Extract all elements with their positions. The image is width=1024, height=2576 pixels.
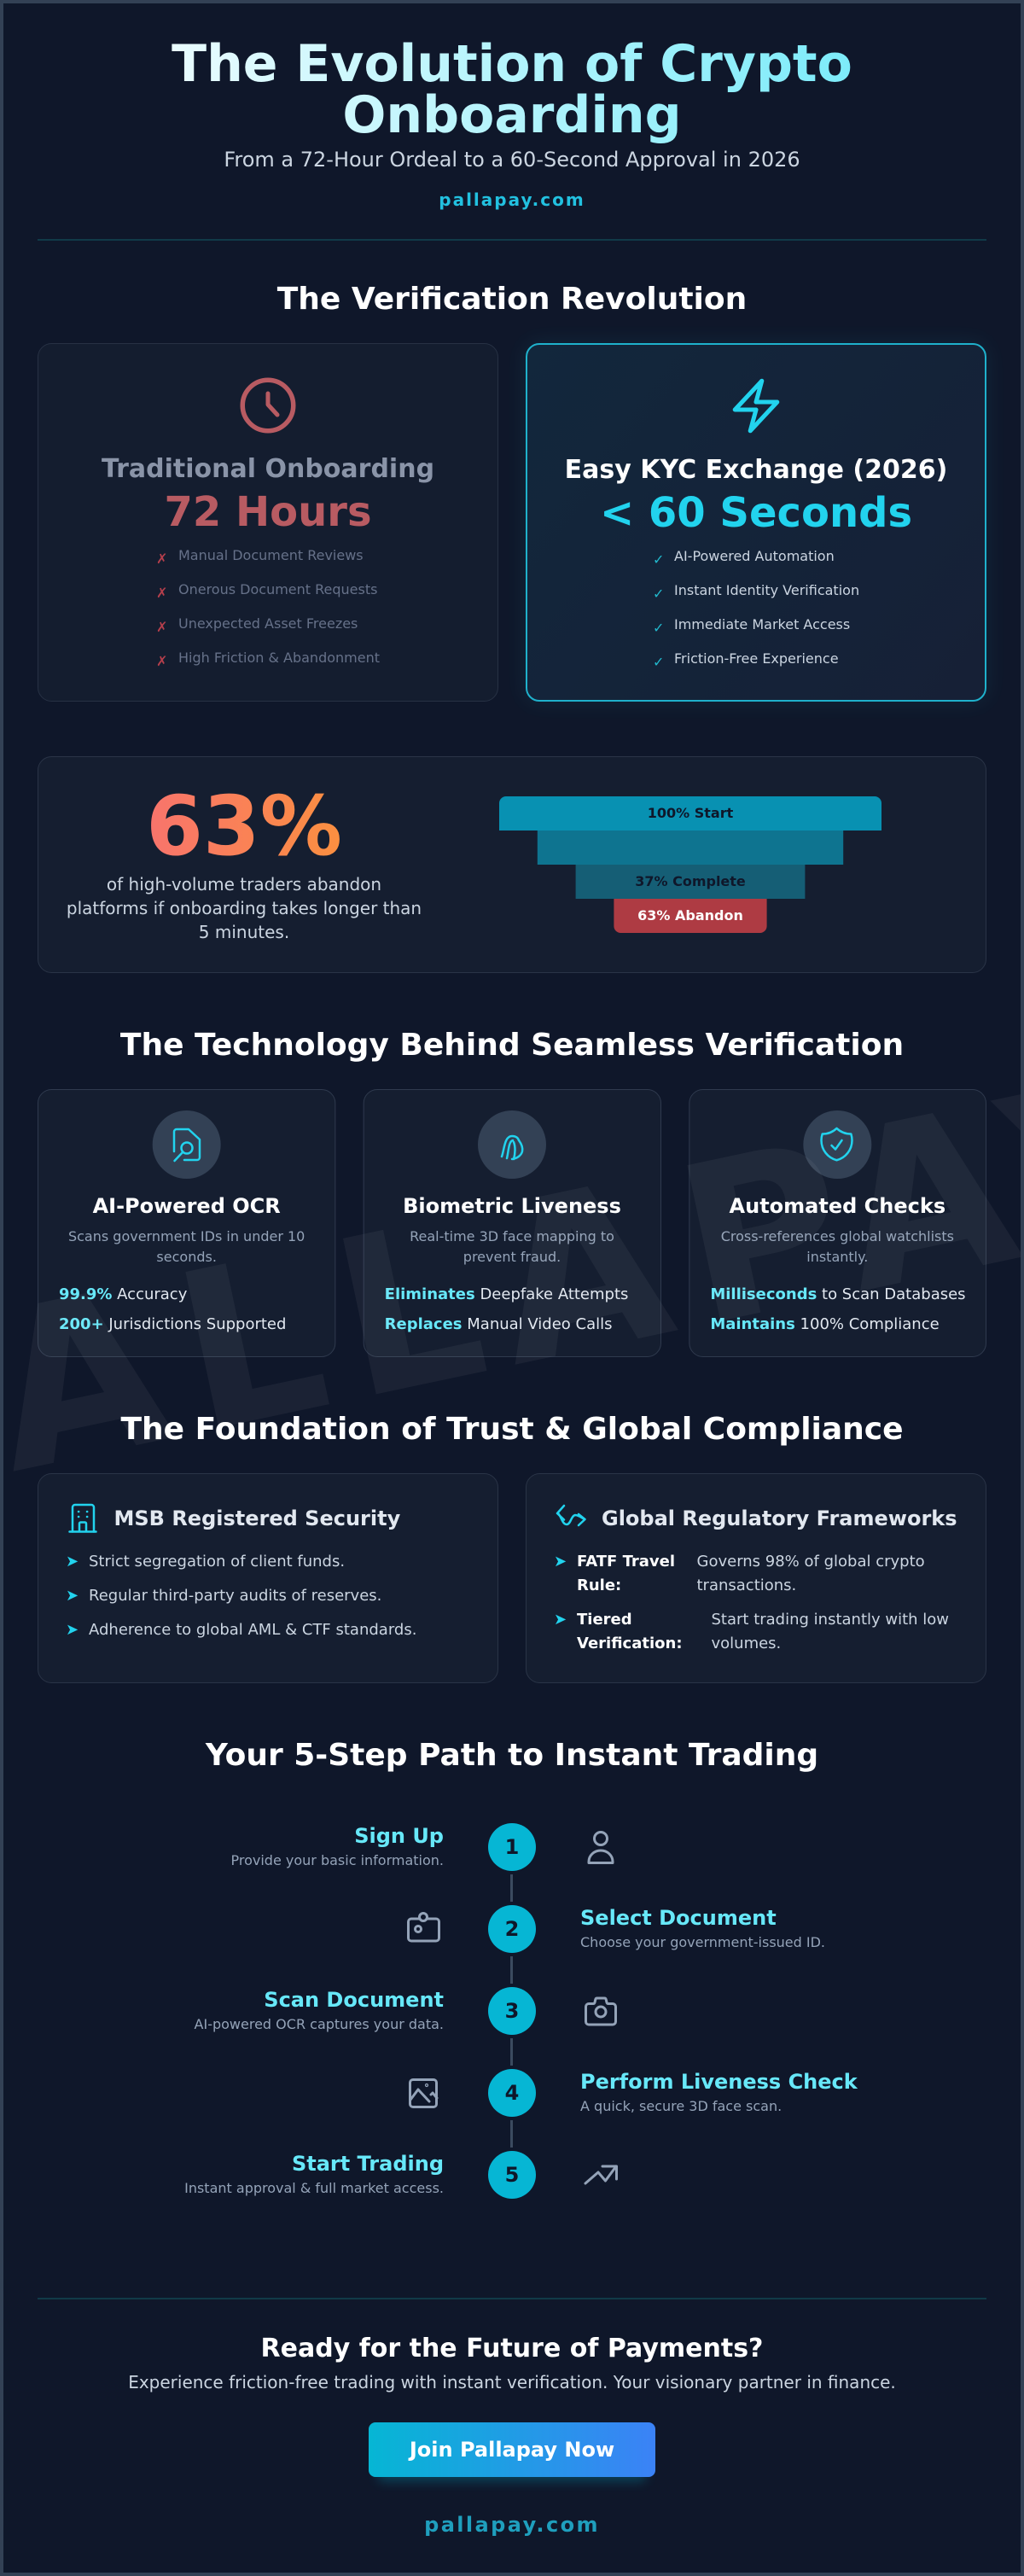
step 5 [184, 2151, 616, 2199]
timeline: five steps [184, 1823, 858, 2199]
panel: AI-powered OCR [38, 1089, 335, 1357]
step 1: 1 [505, 1835, 519, 1859]
step 3: Scan Document [264, 1988, 444, 2012]
benefit list: ✓ [653, 586, 664, 602]
icon: biometric [478, 1110, 546, 1179]
card description: instantly. [806, 1249, 868, 1265]
bullet list: FATF Travel [577, 1553, 675, 1571]
step 4: Perform Liveness Check [580, 2070, 858, 2094]
card stats: Replaces Manual Video Calls [385, 1315, 613, 1333]
bullet list: transactions. [696, 1576, 796, 1594]
drawback list: Unexpected Asset Freezes [178, 615, 358, 632]
drawback list: ✗ [156, 585, 167, 601]
stat description: 5 minutes. [199, 922, 289, 942]
drawback list: ✗ [156, 619, 167, 635]
step 5: Start Trading [292, 2152, 444, 2176]
step 4: 4 [505, 2081, 519, 2105]
card stats: Milliseconds to Scan Databases [710, 1285, 966, 1303]
panel: global regulatory frameworks [526, 1473, 986, 1683]
funnel chart: 37% Complete [635, 873, 746, 889]
step 1: Sign Up [354, 1824, 444, 1848]
benefit list: AI-Powered Automation [674, 548, 835, 564]
drawback list: ✗ [156, 653, 167, 669]
bullet list: Tiered [577, 1611, 632, 1629]
card stats: 99.9% Accuracy [59, 1285, 188, 1303]
step 1 [230, 1823, 613, 1871]
card stats: Eliminates Deepfake Attempts [385, 1285, 628, 1303]
step 3 [195, 1987, 616, 2035]
card stats: Maintains 100% Compliance [710, 1315, 940, 1333]
bullet list: Verification: [577, 1635, 683, 1652]
join button: Join Pallapay Now [408, 2438, 614, 2462]
bullet list: Governs 98% of global crypto [696, 1553, 925, 1571]
icon: lightning bolt [735, 381, 777, 431]
panel heading: Global Regulatory Frameworks [602, 1507, 957, 1530]
heading: technology: The Technology Behind Seamless Verification [120, 1028, 904, 1063]
funnel chart: 100% Start [648, 805, 734, 821]
step 5: 5 [505, 2163, 519, 2187]
step 2 [408, 1905, 825, 1953]
funnel chart [499, 796, 881, 933]
stat description [67, 874, 422, 942]
card description: Cross-references global watchlists [721, 1228, 954, 1244]
bullet list: Rule: [577, 1576, 621, 1594]
bullet list: Regular third-party audits of reserves. [89, 1587, 381, 1605]
bullet list: ➤ [66, 1587, 79, 1605]
bullet list: Strict segregation of client funds. [89, 1553, 345, 1571]
step 4 [410, 2069, 858, 2117]
step 3: 3 [505, 1999, 519, 2023]
CTA description: Experience friction-free trading with instant verification. Your visionary partner in finance. [128, 2372, 896, 2392]
heading: verification revolution: The Verification Revolution [277, 282, 747, 317]
bullet list: ➤ [554, 1611, 567, 1629]
time stat: < 60 Seconds [600, 489, 912, 537]
card description [68, 1228, 305, 1265]
bullet list [554, 1553, 949, 1652]
heading: five step path: Your 5-Step Path to Instant Trading [205, 1738, 818, 1773]
card description: Real-time 3D face mapping to [410, 1228, 614, 1244]
card title: Easy KYC Exchange (2026) [565, 455, 947, 485]
call to action [128, 2334, 896, 2537]
connector lines [510, 1874, 513, 2148]
card stats: 200+ Jurisdictions Supported [59, 1315, 286, 1333]
card title: Biometric Liveness [403, 1194, 621, 1218]
footer brand link: pallapay.com [424, 2513, 600, 2537]
panel heading: MSB Registered Security [114, 1507, 401, 1530]
card title: Traditional Onboarding [102, 454, 434, 484]
benefit list: ✓ [653, 654, 664, 670]
main title second line: Onboarding [342, 85, 682, 145]
stat description: platforms if onboarding takes longer than [67, 898, 422, 918]
panel: biometric liveness [364, 1089, 660, 1357]
header [172, 34, 852, 210]
card stats [59, 1285, 286, 1333]
drawback list: Onerous Document Requests [178, 581, 377, 597]
bullet list: Start trading instantly with low [712, 1611, 949, 1629]
brand link: pallapay.com [439, 189, 585, 210]
panel: abandonment stat and funnel [38, 756, 986, 973]
step 3: AI-powered OCR captures your data. [195, 2016, 444, 2032]
benefit list: ✓ [653, 551, 664, 568]
card description [410, 1228, 614, 1265]
panel: traditional onboarding [38, 343, 498, 702]
main title: The Evolution of Crypto [172, 34, 852, 94]
stat description: of high-volume traders abandon [107, 874, 381, 895]
heading: foundation of trust: The Foundation of Trust & Global Compliance [120, 1412, 904, 1447]
card stats [710, 1285, 966, 1333]
icon: clock [242, 380, 294, 431]
join button [369, 2422, 655, 2482]
step 2: Choose your government-issued ID. [580, 1934, 825, 1950]
benefit list: Immediate Market Access [674, 616, 850, 632]
icon: building [70, 1505, 96, 1531]
icon: shield check [803, 1110, 871, 1179]
card description [721, 1228, 954, 1265]
card title: AI-Powered OCR [93, 1194, 281, 1218]
step 2: 2 [505, 1917, 519, 1941]
benefit list: ✓ [653, 620, 664, 636]
time stat: 72 Hours [164, 488, 372, 536]
icon: regulatory exchange arrows [557, 1506, 585, 1525]
card description: seconds. [156, 1249, 217, 1265]
bullet list: Adherence to global AML & CTF standards. [89, 1621, 416, 1639]
drawback list [156, 547, 380, 669]
icon: document scan [153, 1110, 221, 1179]
panel: MSB registered security [38, 1473, 498, 1683]
benefit list: Friction-Free Experience [674, 650, 839, 667]
drawback list: ✗ [156, 551, 167, 567]
bullet list: volumes. [712, 1635, 781, 1652]
card description: prevent fraud. [463, 1249, 561, 1265]
bullet list: ➤ [66, 1553, 79, 1571]
card description: Scans government IDs in under 10 [68, 1228, 305, 1244]
step 1: Provide your basic information. [230, 1852, 444, 1868]
benefit list: Instant Identity Verification [674, 582, 859, 598]
CTA heading: Ready for the Future of Payments? [261, 2334, 763, 2363]
card stats [385, 1285, 628, 1333]
step 5: Instant approval & full market access. [184, 2180, 444, 2196]
drawback list: Manual Document Reviews [178, 547, 364, 563]
step 4: A quick, secure 3D face scan. [580, 2098, 782, 2114]
bullet list [66, 1553, 416, 1639]
panel: easy KYC exchange [526, 343, 986, 702]
big stat 63%: 63% [146, 778, 342, 874]
step 2: Select Document [580, 1906, 777, 1930]
funnel chart: 63% Abandon [637, 907, 743, 924]
drawback list: High Friction & Abandonment [178, 650, 380, 666]
bullet list: ➤ [554, 1553, 567, 1571]
subtitle: From a 72-Hour Ordeal to a 60-Second Approval in 2026 [224, 148, 800, 172]
card title: Automated Checks [730, 1194, 945, 1218]
panel: automated checks [689, 1089, 986, 1357]
benefit list [653, 548, 859, 670]
bullet list: ➤ [66, 1621, 79, 1639]
